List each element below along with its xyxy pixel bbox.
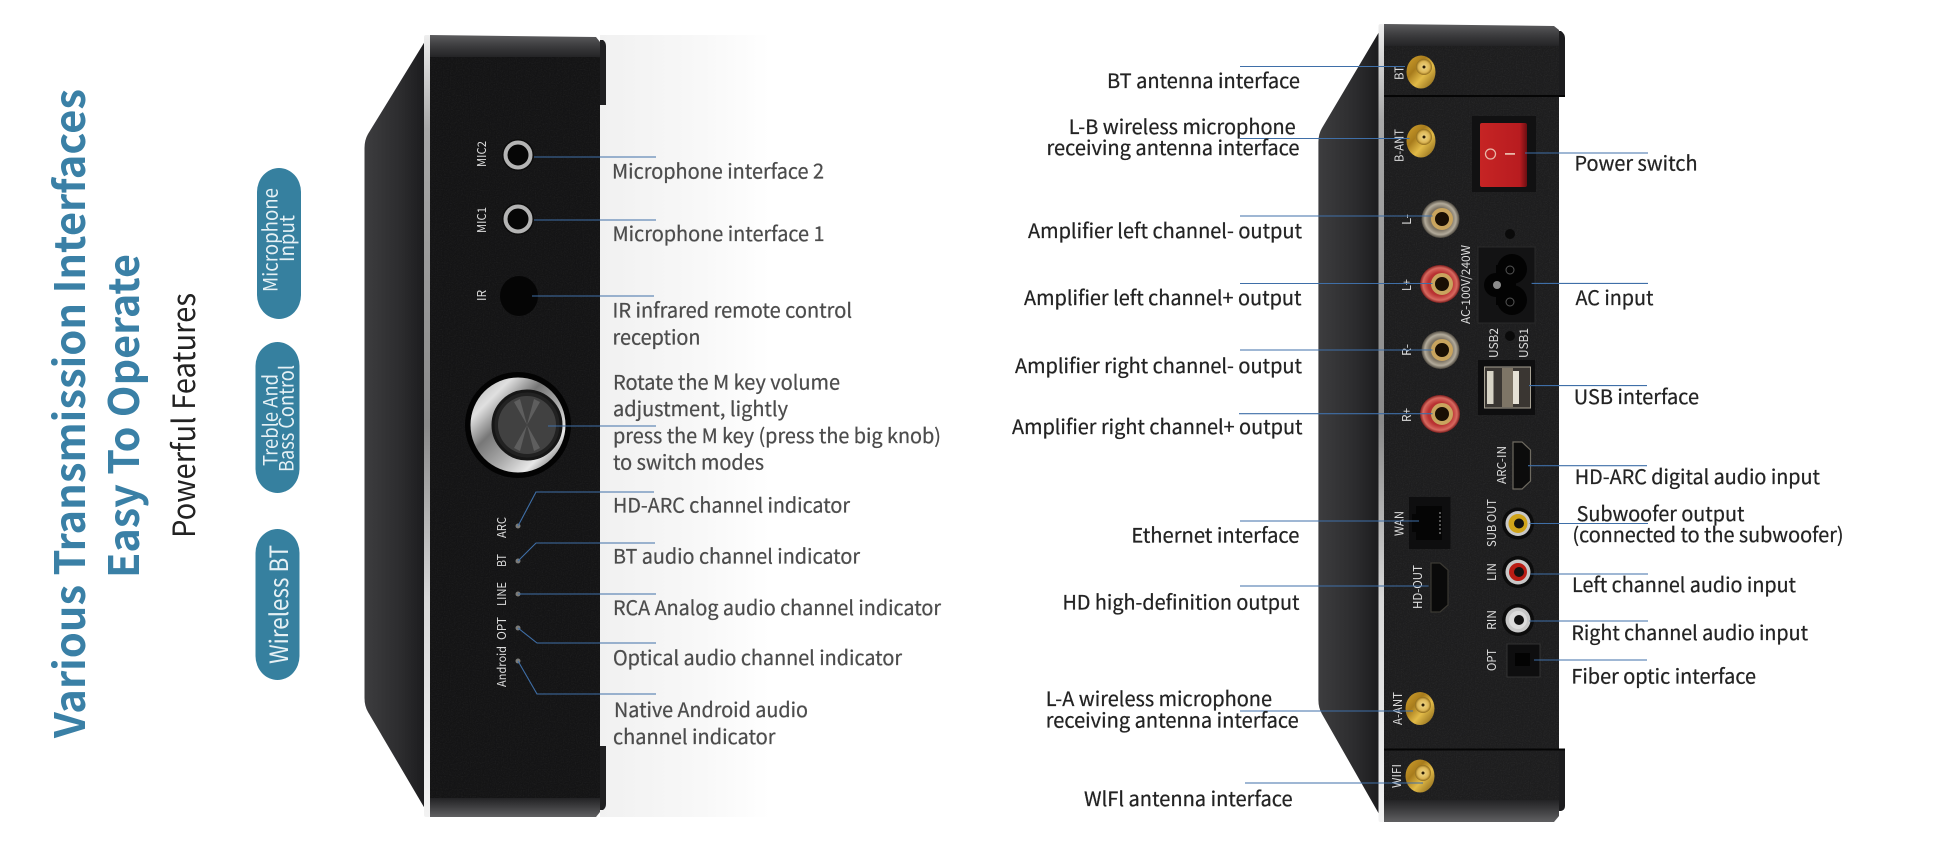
front silk labels: MIC1 — [473, 207, 490, 233]
rear silk labels: WAN — [1390, 511, 1408, 536]
panel: rear of device — [1318, 24, 1565, 822]
AC input socket — [1478, 229, 1535, 341]
jack: MIC2 — [502, 139, 534, 171]
rear silk labels: L+ — [1398, 279, 1415, 291]
RCA jacks — [1502, 508, 1534, 636]
rear labels, left column: Amplifier left channel- output — [1028, 215, 1302, 244]
volume knob — [465, 372, 571, 478]
title: various transmission interfaces: Various Transmission Interfaces — [37, 89, 98, 739]
front silk labels: IR — [473, 290, 490, 301]
subtitle: powerful features: Powerful Features — [159, 293, 204, 538]
front labels text: Rotate the M key volume — [613, 366, 840, 396]
rear labels, right column: Power switch — [1574, 147, 1698, 176]
rear silk labels: HD-OUT — [1409, 565, 1426, 609]
indicator LEDs — [516, 524, 520, 664]
feature pill: microphone input: Microphone — [254, 188, 284, 292]
rear labels, left column: Amplifier right channel+ output — [1012, 411, 1303, 440]
front labels text: channel indicator — [613, 721, 776, 750]
rear labels, right column: Right channel audio input — [1571, 617, 1808, 646]
front labels text: adjustment, lightly — [613, 393, 789, 422]
rear labels, right column — [1571, 147, 1844, 690]
rear silk labels: L- — [1398, 214, 1415, 225]
rear silk labels: R- — [1398, 344, 1415, 356]
rear labels, left column: Ethernet interface — [1131, 520, 1299, 548]
IR window — [500, 276, 538, 316]
rear silk labels: USB2 — [1485, 328, 1502, 358]
HDMI ARC-IN port — [1513, 442, 1530, 489]
rear silk labels: WIFI — [1388, 764, 1405, 788]
rear side bevel — [1318, 32, 1379, 814]
rear silk labels: BT — [1390, 66, 1408, 80]
title: various transmission interfaces — [37, 89, 152, 739]
speaker binding posts — [1420, 200, 1460, 433]
feature pill: treble and bass control: Treble And — [254, 374, 284, 466]
rear silk labels: A-ANT — [1389, 692, 1406, 725]
rear silk labels: RIN — [1483, 610, 1500, 630]
rear labels, right column: Left channel audio input — [1572, 569, 1796, 598]
front labels text: to switch modes — [613, 446, 764, 476]
panel: front of device — [364, 35, 606, 817]
front labels text: Optical audio channel indicator — [613, 642, 902, 671]
rear silk labels: LIN — [1483, 563, 1500, 581]
front labels text: Microphone interface 1 — [612, 218, 824, 247]
rear silk labels: ARC-IN — [1493, 446, 1510, 484]
front labels text: BT audio channel indicator — [613, 540, 860, 570]
jack: MIC1 — [502, 203, 534, 235]
leader lines: front labels — [518, 157, 656, 694]
device side bevel — [364, 42, 424, 808]
front labels text: reception — [612, 322, 700, 350]
rear silk labels: USB1 — [1515, 328, 1532, 358]
rear labels, left column: receiving antenna interface — [1046, 704, 1299, 734]
rear silk labels: R+ — [1398, 408, 1415, 422]
rear silk labels: SUB OUT — [1483, 499, 1500, 547]
rear labels, left column: L-A wireless microphone — [1046, 683, 1272, 712]
front silk labels: BT — [493, 554, 510, 567]
front silk labels: MIC2 — [473, 141, 490, 167]
SMA antenna connectors — [1406, 56, 1436, 792]
front silk labels: ARC — [493, 517, 510, 538]
red power switch — [1472, 116, 1536, 192]
front labels text: Microphone interface 2 — [612, 156, 824, 184]
USB ports — [1478, 360, 1535, 415]
front labels text: HD-ARC channel indicator — [613, 490, 850, 519]
rear labels, right column: HD-ARC digital audio input — [1575, 461, 1820, 490]
front silk labels: LINE — [493, 582, 510, 606]
rear labels, left column: BT antenna interface — [1107, 65, 1300, 94]
front labels text — [612, 156, 941, 750]
front labels text: Native Android audio — [614, 694, 808, 723]
rear labels, left column — [1012, 65, 1303, 812]
leader lines: rear labels — [1239, 66, 1648, 783]
rear labels, left column: HD high-definition output — [1062, 586, 1300, 616]
rear labels, right column: AC input — [1576, 282, 1654, 311]
rear labels, left column: Amplifier left channel+ output — [1024, 282, 1302, 311]
rear labels, left column: WlFl antenna interface — [1084, 783, 1293, 812]
feature pill: treble and bass control — [254, 342, 300, 493]
feature pill: microphone input — [254, 168, 301, 319]
rear silk labels: B-ANT — [1390, 129, 1408, 162]
front silk labels: OPT — [493, 617, 510, 640]
feature pill: microphone input: Input — [271, 215, 300, 262]
title: various transmission interfaces: Easy To Operate — [91, 254, 152, 578]
rear labels, right column: (connected to the subwoofer) — [1572, 519, 1844, 548]
front silk labels — [473, 141, 510, 687]
rear labels, right column: USB interface — [1574, 381, 1699, 410]
feature pill: wireless BT: Wireless BT — [260, 545, 296, 664]
rear labels, right column: Subwoofer output — [1577, 498, 1745, 527]
rear silk labels — [1388, 66, 1532, 788]
rear labels, right column: Fiber optic interface — [1571, 661, 1756, 690]
rear labels, left column: Amplifier right channel- output — [1015, 350, 1302, 379]
panel: fade behind front labels — [600, 35, 770, 817]
front labels text: press the M key (press the big knob) — [613, 420, 941, 449]
front labels text: RCA Analog audio channel indicator — [613, 592, 941, 621]
rear silk labels: OPT — [1483, 649, 1500, 671]
front silk labels: Android — [493, 646, 510, 687]
rear silk labels: AC-100V/240W — [1457, 245, 1474, 324]
feature pill: treble and bass control: Bass Control — [270, 365, 300, 472]
ethernet port — [1409, 497, 1450, 549]
front labels text: IR infrared remote control — [612, 294, 852, 324]
rear labels, left column: receiving antenna interface — [1046, 132, 1300, 161]
HDMI output port — [1431, 563, 1448, 612]
rear labels, left column: L-B wireless microphone — [1069, 111, 1296, 140]
optical port — [1507, 644, 1540, 677]
